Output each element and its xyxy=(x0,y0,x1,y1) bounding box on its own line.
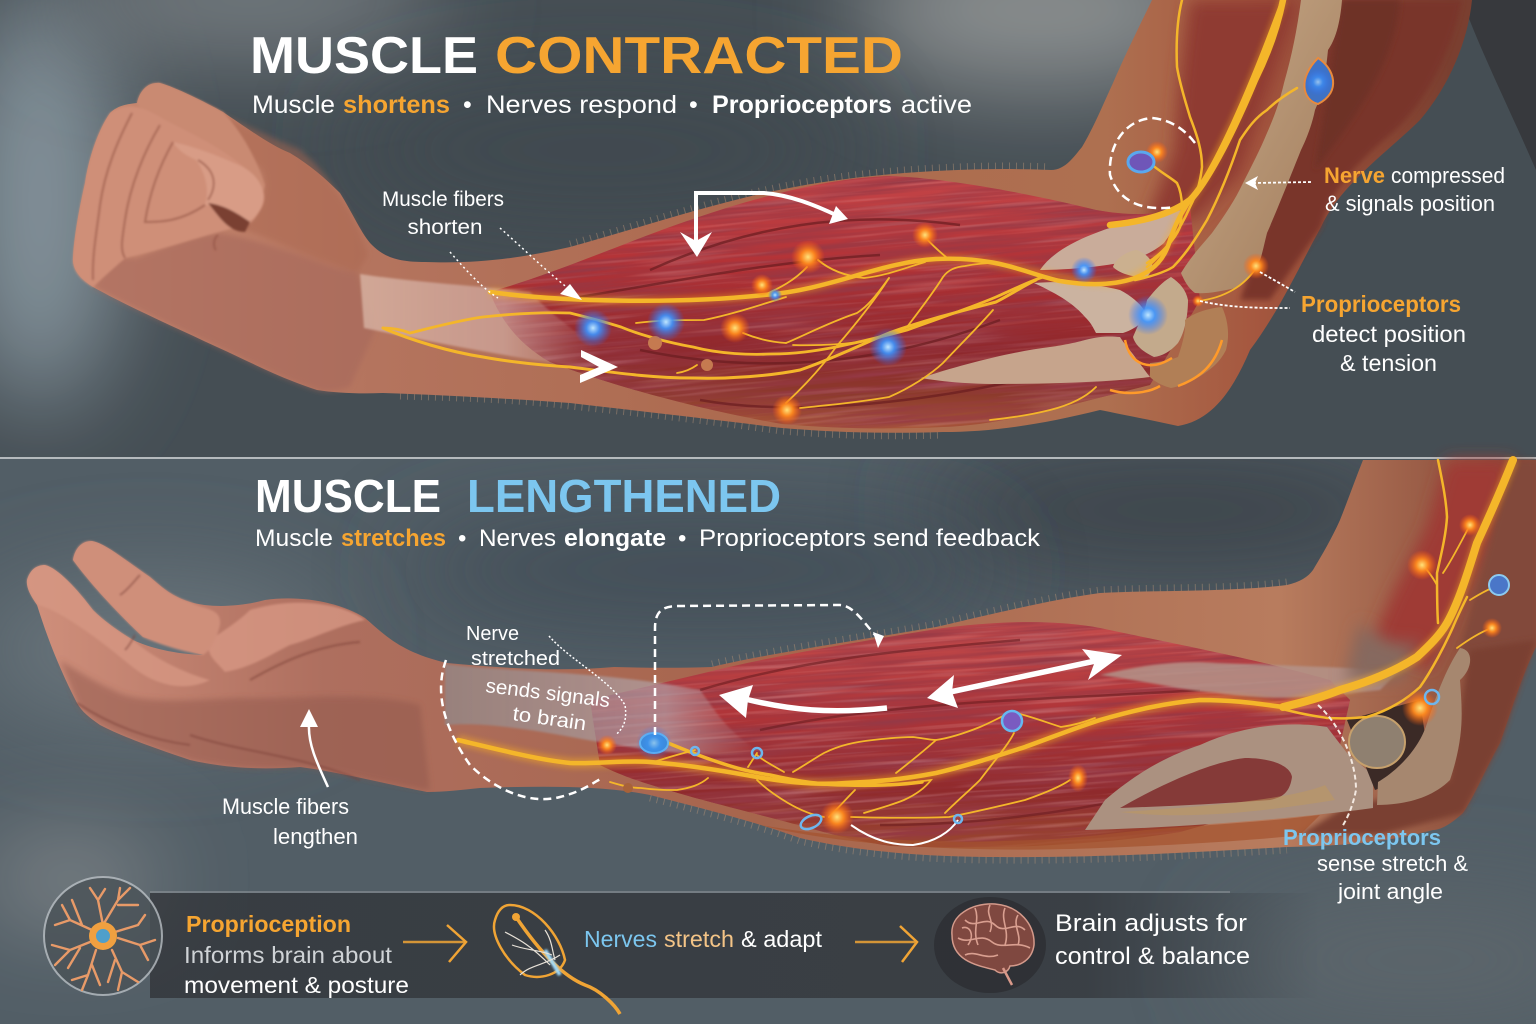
forearm nerves xyxy=(383,0,1297,420)
subtitle: lengthened: elongate xyxy=(564,525,666,552)
annotations: contracted guides xyxy=(450,118,1311,308)
panel: muscle contracted background xyxy=(0,0,1536,458)
subtitle: lengthened: Muscle xyxy=(255,525,333,552)
title: muscle contracted xyxy=(250,27,903,85)
illustration: lengthened arm xyxy=(26,450,1536,864)
label: nerve stretched: to brain xyxy=(511,703,588,735)
subtitle: lengthened xyxy=(255,525,1041,552)
arrow: wrist upward xyxy=(300,709,328,787)
label: muscle fibers lengthen xyxy=(222,794,358,849)
icon: nerve stretch xyxy=(494,905,620,1014)
receptor nodes xyxy=(597,514,1509,834)
nerve white loop xyxy=(851,820,958,845)
label: nerve compressed: Nerve xyxy=(1324,163,1385,188)
tendon near elbow xyxy=(1040,210,1181,270)
arrow: to nerves xyxy=(403,925,466,962)
elbow bones xyxy=(1085,648,1470,830)
subtitle: contracted: Proprioceptors xyxy=(712,91,892,119)
text: brain adjusts: Brain adjusts for xyxy=(1055,910,1247,937)
text: brain adjusts: control & balance xyxy=(1055,943,1250,970)
elbow glow line xyxy=(1110,340,1222,393)
illustration: contracted arm xyxy=(73,0,1472,484)
panel: muscle lengthened background xyxy=(0,440,1536,1024)
label: muscle fibers lengthen: lengthen xyxy=(273,824,358,849)
text: proprioception: Proprioception xyxy=(186,911,351,937)
label: proprioceptors sense: sense stretch & xyxy=(1317,851,1468,876)
subtitle: contracted: • xyxy=(463,91,472,119)
icon: brain xyxy=(952,904,1034,985)
label: nerve compressed: & signals position xyxy=(1325,191,1495,216)
arm hair fringe xyxy=(400,166,1051,436)
subtitle: contracted: active xyxy=(901,91,972,119)
dashed guides xyxy=(441,605,878,799)
label: nerve compressed: compressed xyxy=(1391,163,1505,188)
subtitle: lengthened: • xyxy=(458,525,466,552)
title: muscle lengthened xyxy=(255,470,781,522)
upper arm red muscle xyxy=(1300,460,1536,835)
fist: fingers xyxy=(73,83,265,287)
elbow fascia xyxy=(1345,623,1420,680)
subtitle: contracted: • xyxy=(689,91,698,119)
skin: fist and forearm xyxy=(73,0,1472,433)
subtitle: contracted: Nerves respond xyxy=(486,91,677,119)
text: proprioception: movement & posture xyxy=(184,972,409,998)
fist: back of hand shading xyxy=(93,108,375,391)
subtitle: contracted: shortens xyxy=(343,91,450,119)
label: muscle fibers shorten xyxy=(382,188,504,239)
text: proprioception: Informs brain about xyxy=(184,942,393,968)
label: muscle fibers shorten: Muscle fibers xyxy=(382,188,504,211)
bottom orange band xyxy=(760,815,1320,850)
label: proprioceptors sense: Proprioceptors xyxy=(1283,825,1441,850)
arm hair fringe xyxy=(650,582,1287,860)
dotted leader xyxy=(549,636,626,735)
label: nerve compressed xyxy=(1324,163,1505,216)
label: proprioceptors detect: detect position xyxy=(1312,321,1466,347)
label: proprioceptors sense xyxy=(1283,825,1468,904)
label: nerve stretched: stretched xyxy=(471,648,560,670)
subtitle: contracted xyxy=(252,91,972,119)
text: nerves stretch: stretch xyxy=(664,926,734,952)
title: muscle lengthened: MUSCLE xyxy=(255,470,441,522)
title: muscle lengthened: LENGTHENED xyxy=(467,470,781,522)
elbow tendon xyxy=(1100,662,1400,698)
subtitle: lengthened: • xyxy=(678,525,686,552)
nerves xyxy=(458,460,1513,818)
text: nerves stretch xyxy=(584,926,823,952)
subtitle: lengthened: stretches xyxy=(341,525,446,552)
forearm muscle xyxy=(590,622,1350,848)
arrow: muscle shortening xyxy=(580,193,848,383)
nerve glow xyxy=(490,0,1283,301)
label: muscle fibers lengthen: Muscle fibers xyxy=(222,794,349,819)
text: brain adjusts xyxy=(1055,910,1250,970)
label: proprioceptors detect: Proprioceptors xyxy=(1301,291,1461,317)
label: proprioceptors sense: joint angle xyxy=(1337,879,1443,904)
label: nerve stretched xyxy=(466,623,611,735)
palm and hand shading xyxy=(27,541,430,790)
arrow: stretching xyxy=(719,649,1122,718)
label: proprioceptors detect: & tension xyxy=(1340,350,1437,376)
wrist tendons xyxy=(360,274,640,372)
subtitle: lengthened: Nerves xyxy=(479,525,556,552)
panel: bottom summary band xyxy=(44,877,1320,1014)
title: muscle contracted: CONTRACTED xyxy=(495,27,903,85)
subtitle: lengthened: Proprioceptors send feedback xyxy=(699,525,1041,552)
title: muscle contracted: MUSCLE xyxy=(250,27,478,85)
proprioceptor nodes xyxy=(574,58,1333,425)
wrist tendon sheath xyxy=(445,664,760,755)
text: nerves stretch: Nerves xyxy=(584,926,657,952)
label: nerve stretched: Nerve xyxy=(466,623,519,645)
skin: open hand and forearm xyxy=(27,460,1536,857)
icon: neuron xyxy=(44,877,162,995)
text: nerves stretch: & adapt xyxy=(741,926,823,952)
label: nerve stretched: sends signals xyxy=(484,675,611,712)
arrow: to brain xyxy=(855,926,917,962)
subtitle: contracted: Muscle xyxy=(252,91,335,119)
label: proprioceptors detect xyxy=(1301,291,1466,376)
forearm muscle xyxy=(491,176,1200,428)
elbow bones xyxy=(921,0,1342,388)
text: proprioception xyxy=(184,911,409,998)
nerve glow xyxy=(458,460,1513,784)
label: muscle fibers shorten: shorten xyxy=(408,216,482,239)
upper arm muscle xyxy=(1145,0,1462,300)
